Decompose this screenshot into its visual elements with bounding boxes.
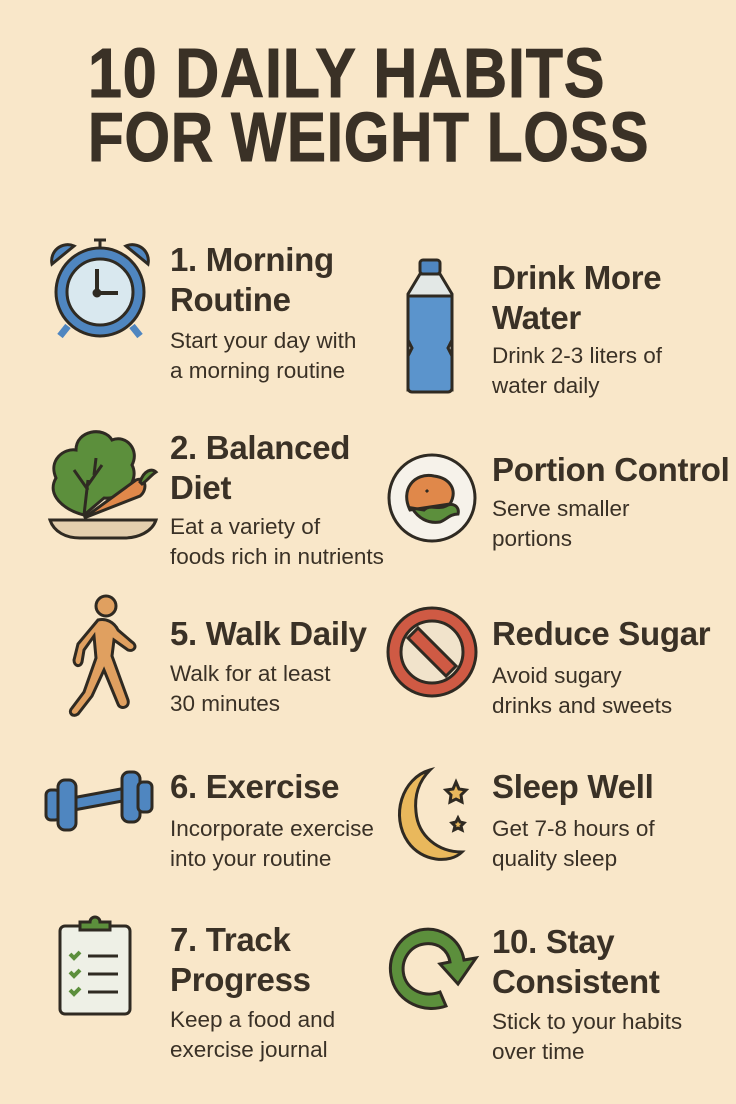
icon: walker bbox=[68, 594, 136, 717]
heading: drink more water: Water bbox=[492, 299, 581, 336]
text: sugar: Avoid sugary bbox=[492, 663, 622, 688]
title: 10 DAILY HABITS bbox=[88, 34, 605, 112]
text: sleep: quality sleep bbox=[492, 846, 617, 871]
text: track: exercise journal bbox=[170, 1037, 328, 1062]
icon: plate bbox=[388, 454, 476, 542]
text: walk bbox=[170, 661, 330, 716]
heading: sleep well: Sleep Well bbox=[492, 768, 653, 805]
icon: clipboard bbox=[58, 916, 132, 1016]
heading: stay consistent: 10. Stay bbox=[492, 923, 614, 960]
heading: morning routine: 1. Morning bbox=[170, 241, 334, 278]
icon: moon and stars bbox=[398, 767, 470, 861]
text: consistent bbox=[492, 1009, 682, 1064]
text: morning routine bbox=[170, 328, 356, 383]
heading: portion control: Portion Control bbox=[492, 451, 729, 488]
heading: balanced diet bbox=[170, 429, 350, 506]
text: exercise bbox=[170, 816, 374, 871]
title: FOR WEIGHT LOSS bbox=[88, 98, 649, 176]
text: track: Keep a food and bbox=[170, 1007, 335, 1032]
icon: alarm clock bbox=[50, 238, 150, 338]
heading: drink more water: Drink More bbox=[492, 259, 661, 296]
text: morning routine: a morning routine bbox=[170, 358, 345, 383]
heading: walk daily: 5. Walk Daily bbox=[170, 615, 367, 652]
text: exercise: into your routine bbox=[170, 846, 331, 871]
heading: stay consistent: Consistent bbox=[492, 963, 660, 1000]
text: exercise: Incorporate exercise bbox=[170, 816, 374, 841]
heading: balanced diet: 2. Balanced bbox=[170, 429, 350, 466]
text: diet bbox=[170, 514, 384, 569]
heading: drink more water bbox=[492, 259, 661, 336]
text: portions bbox=[492, 496, 630, 551]
icon: no sign bbox=[386, 606, 478, 698]
title bbox=[88, 34, 649, 176]
text: morning routine: Start your day with bbox=[170, 328, 356, 353]
icon: dumbbell bbox=[44, 770, 154, 832]
heading: morning routine bbox=[170, 241, 334, 318]
heading: track progress bbox=[170, 921, 311, 998]
text: portions: portions bbox=[492, 526, 572, 551]
heading: stay consistent bbox=[492, 923, 660, 1000]
text: sugar bbox=[492, 663, 672, 718]
icon: cycle arrow bbox=[388, 928, 480, 1010]
text: diet: Eat a variety of bbox=[170, 514, 320, 539]
heading: exercise: 6. Exercise bbox=[170, 768, 339, 805]
heading: track progress: 7. Track bbox=[170, 921, 291, 958]
text: diet: foods rich in nutrients bbox=[170, 544, 384, 569]
text: track bbox=[170, 1007, 335, 1062]
text: water bbox=[492, 343, 662, 398]
heading: morning routine: Routine bbox=[170, 281, 291, 318]
text: walk: 30 minutes bbox=[170, 691, 280, 716]
text: portions: Serve smaller bbox=[492, 496, 630, 521]
text: sleep bbox=[492, 816, 655, 871]
text: sleep: Get 7-8 hours of bbox=[492, 816, 655, 841]
heading: balanced diet: Diet bbox=[170, 469, 231, 506]
icon: vegetables bowl bbox=[48, 430, 158, 540]
text: water: Drink 2-3 liters of bbox=[492, 343, 662, 368]
text: consistent: over time bbox=[492, 1039, 585, 1064]
text: walk: Walk for at least bbox=[170, 661, 330, 686]
icon: water bottle bbox=[406, 258, 454, 394]
text: sugar: drinks and sweets bbox=[492, 693, 672, 718]
text: water: water daily bbox=[492, 373, 600, 398]
heading: reduce sugar: Reduce Sugar bbox=[492, 615, 710, 652]
text: consistent: Stick to your habits bbox=[492, 1009, 682, 1034]
heading: track progress: Progress bbox=[170, 961, 311, 998]
